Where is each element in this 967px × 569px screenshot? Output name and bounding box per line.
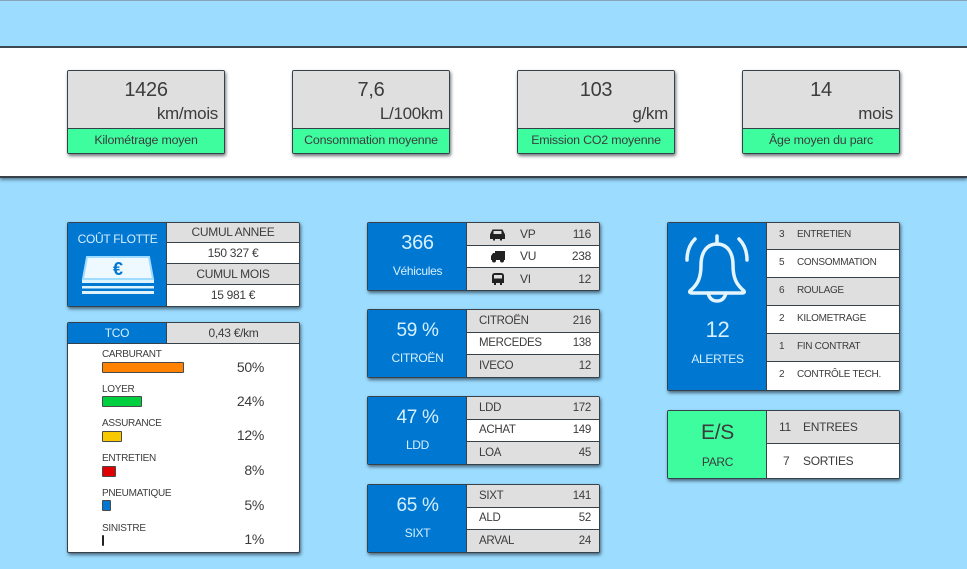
KPI: kilometrage: Kilométrage moyen [94, 133, 198, 147]
panel: citroen: IVECO [479, 360, 513, 372]
panel: citroen: MERCEDES [479, 337, 542, 349]
panel: TCO [67, 322, 300, 553]
panel: entrees sorties: 7 [783, 454, 789, 468]
panel: entrees sorties: SORTIES [803, 454, 853, 468]
panel: vehicules: 366 [401, 232, 434, 254]
panel: alertes: 1 [779, 341, 784, 352]
panel: citroen: CITROËN [392, 351, 443, 365]
panel: SIXT: 24 [579, 535, 591, 547]
icon: bus [492, 273, 504, 285]
panel: LDD: 47 % [396, 407, 439, 428]
panel: vehicules: VP [520, 227, 535, 241]
panel: alertes: 2 [779, 313, 784, 324]
KPI: age: 14 [810, 79, 832, 101]
row: assurance: 12% [237, 427, 264, 443]
panel: alertes: CONSOMMATION [797, 257, 877, 268]
panel: LDD: 45 [579, 447, 591, 459]
panel: cout flotte: CUMUL MOIS [196, 267, 270, 281]
panel: vehicules: 116 [573, 227, 591, 241]
row: sinistre [102, 523, 264, 547]
panel: SIXT: 52 [579, 512, 591, 524]
row: pneumatique [102, 488, 264, 513]
panel: vehicules [367, 222, 600, 291]
panel: entrees sorties: PARC [702, 455, 733, 469]
panel: alertes: ROULAGE [797, 285, 844, 296]
panel: alertes: 5 [779, 257, 784, 268]
row: assurance [102, 418, 264, 443]
panel: LDD [367, 396, 600, 465]
TCO header: 0,43 €/km [208, 326, 258, 340]
KPI: consommation [292, 70, 450, 154]
row: carburant: CARBURANT [102, 349, 162, 360]
panel: SIXT: SIXT [479, 490, 503, 502]
KPI: consommation: L/100km [380, 104, 443, 123]
row: loyer: LOYER [102, 384, 134, 395]
panel: entrees sorties: 11 [779, 420, 791, 434]
panel: LDD: LDD [406, 438, 429, 452]
row: carburant: 50% [237, 359, 264, 375]
icon: truck [491, 251, 505, 262]
panel: citroen [367, 309, 600, 378]
panel: entrees sorties: E/S [701, 421, 734, 444]
KPI: consommation: 7,6 [358, 79, 384, 101]
panel: alertes: ENTRETIEN [797, 229, 851, 240]
panel: citroen: 138 [573, 337, 591, 349]
panel: SIXT: 65 % [396, 495, 439, 516]
KPI: age: mois [858, 104, 893, 123]
row: entretien: 8% [244, 462, 264, 478]
panel: vehicules: Véhicules [393, 264, 442, 278]
panel: citroen: CITROËN [479, 315, 529, 327]
row: sinistre: SINISTRE [102, 523, 146, 534]
KPI: kilometrage [67, 70, 225, 154]
panel: cout flotte: 150 327 € [208, 246, 258, 260]
KPI: emission: 103 [580, 79, 612, 101]
panel: SIXT: 141 [573, 490, 591, 502]
panel: vehicules: VI [520, 272, 531, 286]
panel: entrees sorties: ENTREES [803, 420, 858, 434]
panel: alertes [667, 222, 900, 391]
panel: cout flotte: CUMUL ANNEE [192, 225, 274, 239]
panel: LDD: ACHAT [479, 424, 516, 436]
KPI: emission: g/km [632, 104, 668, 123]
row: sinistre: 1% [244, 531, 264, 547]
panel: LDD: LDD [479, 402, 501, 414]
panel: SIXT: SIXT [405, 526, 430, 540]
panel: alertes: FIN CONTRAT [797, 341, 860, 352]
panel: cout flotte: COÛT FLOTTE [78, 232, 157, 246]
KPI band [0, 48, 967, 178]
panel: citroen: 216 [573, 315, 591, 327]
KPI: emission: Emission CO2 moyenne [531, 133, 661, 147]
panel: LDD: 149 [573, 424, 591, 436]
row: loyer [102, 384, 264, 409]
KPI: kilometrage: km/mois [157, 104, 218, 123]
panel: citroen: 59 % [396, 320, 439, 341]
panel: LDD: 172 [573, 402, 591, 414]
panel: cout flotte: 15 981 € [211, 288, 255, 302]
KPI: kilometrage: 1426 [124, 79, 168, 101]
panel: vehicules: 12 [578, 272, 591, 286]
KPI: emission [517, 70, 675, 154]
row: assurance: ASSURANCE [102, 418, 162, 429]
row: pneumatique: PNEUMATIQUE [102, 488, 171, 499]
row: pneumatique: 5% [244, 497, 264, 513]
icon: banknotes: € [113, 259, 123, 279]
panel: alertes: 6 [779, 285, 784, 296]
KPI: age [742, 70, 900, 154]
KPI: age: Âge moyen du parc [769, 133, 873, 147]
panel: SIXT: ALD [479, 512, 500, 524]
panel: cout flotte [67, 222, 300, 307]
panel: alertes: 12 [706, 317, 729, 342]
row: loyer: 24% [237, 393, 264, 409]
panel: entrees sorties [667, 410, 900, 479]
panel: alertes: 3 [779, 229, 784, 240]
row: carburant [102, 349, 264, 375]
top band [0, 0, 967, 48]
panel: citroen: 12 [579, 360, 591, 372]
panel: alertes: ALERTES [691, 352, 744, 366]
panel: LDD: LOA [479, 447, 501, 459]
panel: SIXT [367, 484, 600, 553]
TCO header: TCO [105, 326, 129, 340]
row: entretien [102, 453, 264, 478]
KPI: consommation: Consommation moyenne [304, 133, 438, 147]
panel: alertes: CONTRÔLE TECH. [797, 369, 881, 380]
icon: bell [685, 234, 749, 303]
panel: vehicules: 238 [572, 249, 591, 263]
TCO header [68, 323, 300, 344]
row: entretien: ENTRETIEN [102, 453, 156, 464]
panel: vehicules: VU [520, 249, 536, 263]
icon: car [490, 230, 505, 240]
panel: alertes: KILOMETRAGE [797, 313, 866, 324]
panel: SIXT: ARVAL [479, 535, 514, 547]
panel: alertes: 2 [779, 369, 784, 380]
icon: banknotes [82, 256, 154, 294]
